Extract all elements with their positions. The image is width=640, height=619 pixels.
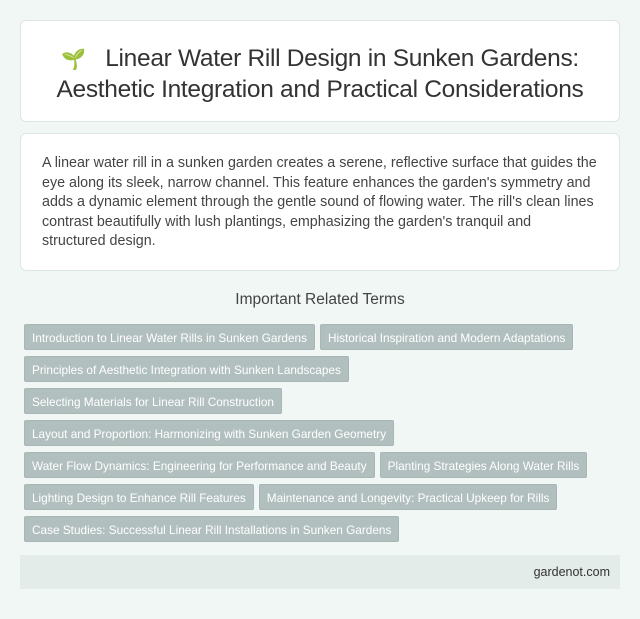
related terms tags: Principles of Aesthetic Integration with Sunken Landscapes bbox=[32, 363, 341, 377]
title: Aesthetic Integration and Practical Considerations bbox=[56, 76, 584, 103]
title: 🌱 Linear Water Rill Design in Sunken Gardens: bbox=[61, 45, 579, 72]
related terms tags bbox=[24, 324, 587, 542]
related terms heading: Important Related Terms bbox=[235, 291, 405, 308]
related terms tags: Maintenance and Longevity: Practical Upkeep for Rills bbox=[267, 491, 549, 505]
title bbox=[56, 45, 584, 103]
related terms tags: Case Studies: Successful Linear Rill Installations in Sunken Gardens bbox=[32, 523, 391, 537]
related terms tags: Historical Inspiration and Modern Adaptations bbox=[328, 331, 565, 345]
related terms tags: Layout and Proportion: Harmonizing with Sunken Garden Geometry bbox=[32, 427, 386, 441]
title card bbox=[20, 20, 620, 122]
related terms tags: Selecting Materials for Linear Rill Construction bbox=[32, 395, 274, 409]
description text: A linear water rill in a sunken garden creates a serene, reflective surface that guides the eye along its sleek, narrow channel. This feature enhances the garden's symmetry and adds a dynamic element through the gentle sound of flowing water. The rill's clean lines contrast beautifully with lush plantings, emphasizing the garden's tranquil and structured design. bbox=[42, 155, 597, 249]
related terms tags: Water Flow Dynamics: Engineering for Performance and Beauty bbox=[32, 459, 367, 473]
description card bbox=[20, 133, 620, 271]
related terms tags: Introduction to Linear Water Rills in Sunken Gardens bbox=[32, 331, 307, 345]
related terms tags: Planting Strategies Along Water Rills bbox=[388, 459, 579, 473]
footer: gardenot.com bbox=[534, 565, 610, 579]
related terms tags: Lighting Design to Enhance Rill Features bbox=[32, 491, 246, 505]
footer bbox=[20, 555, 620, 589]
